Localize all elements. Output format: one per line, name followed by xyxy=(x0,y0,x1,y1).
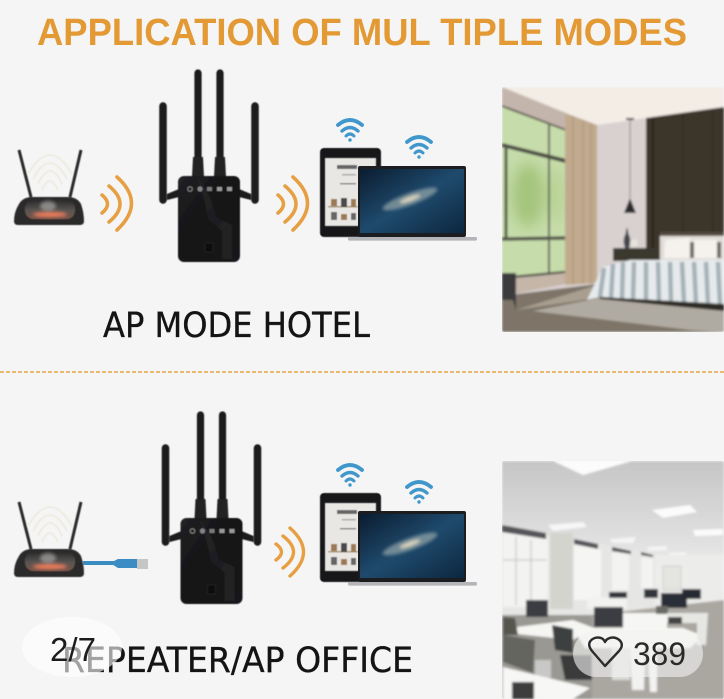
icon: blue ethernet cable xyxy=(83,559,148,569)
like counter pill xyxy=(573,630,703,677)
icon: orange signal waves from repeater xyxy=(276,528,304,576)
icon: tablet wifi symbol xyxy=(338,120,362,142)
panel: AP mode diagram xyxy=(14,73,477,346)
panel: repeater/AP mode diagram xyxy=(14,415,477,681)
label: repeater/AP office: REPEATER/AP OFFICE xyxy=(62,641,413,681)
photo: office xyxy=(502,461,724,699)
icon: orange signal waves from repeater xyxy=(278,177,308,230)
divider xyxy=(0,371,724,373)
page counter text: 2/7 xyxy=(50,631,96,668)
icon: main router xyxy=(14,502,84,577)
icon: wifi repeater xyxy=(166,415,258,604)
icon: tablet wifi symbol xyxy=(338,465,362,487)
icon: tablet and laptop xyxy=(320,148,477,241)
page counter pill xyxy=(22,617,122,677)
like count: 389 xyxy=(633,636,686,672)
label: AP mode hotel: AP MODE HOTEL xyxy=(103,306,370,346)
icon: tablet and laptop xyxy=(320,493,477,586)
icon: orange signal waves from router xyxy=(102,177,132,230)
icon: heart xyxy=(589,638,622,666)
icon: main router xyxy=(14,150,84,225)
icon: laptop wifi symbol xyxy=(407,137,431,159)
title: APPLICATION OF MUL TIPLE MODES xyxy=(37,12,687,54)
photo: hotel bedroom xyxy=(502,87,724,332)
icon: wifi repeater xyxy=(163,73,255,262)
icon: laptop wifi symbol xyxy=(407,482,431,504)
